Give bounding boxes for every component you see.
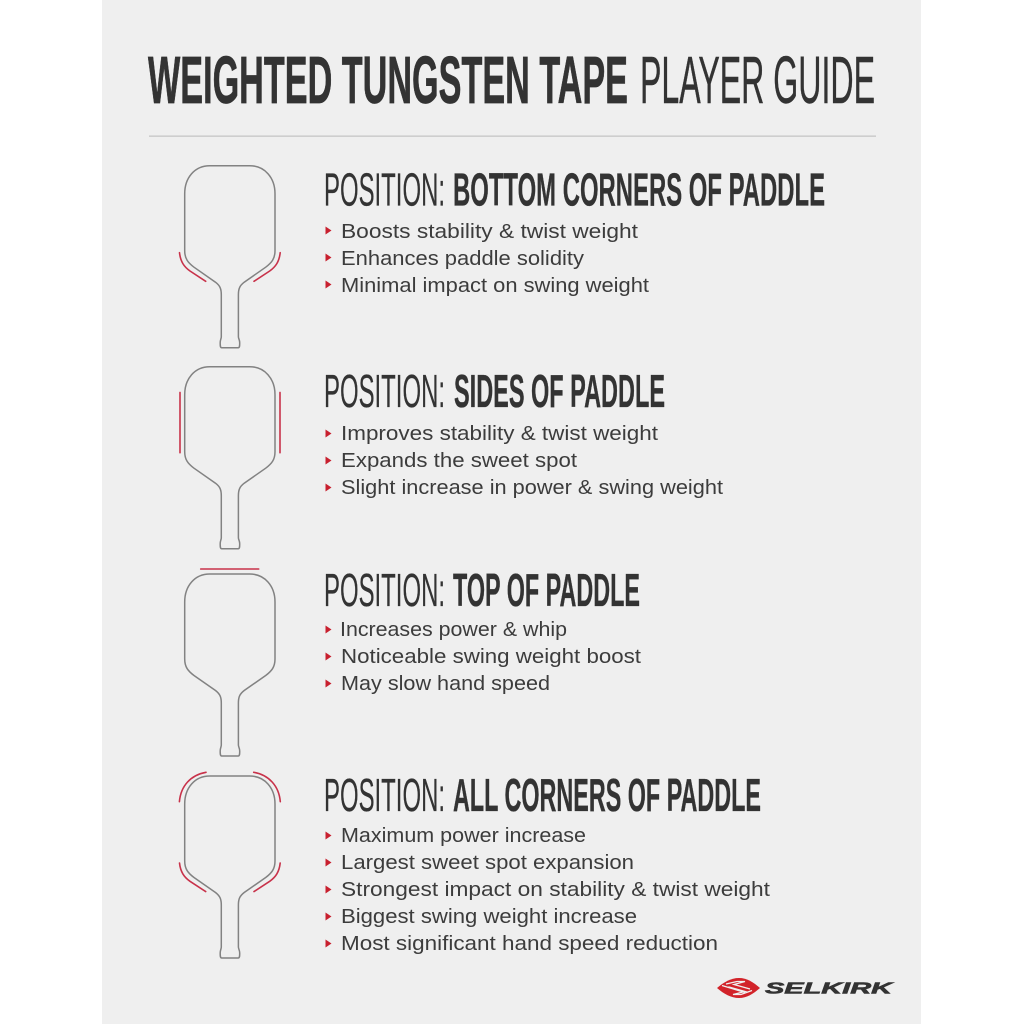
- bullet list: sides: [326, 423, 723, 499]
- background panel: [102, 0, 921, 1024]
- bullet list: bottom corners: [326, 221, 649, 297]
- bullet list: sides: Slight increase in power & swing weight: [341, 477, 723, 499]
- heading: all corners: POSITION:: [324, 769, 445, 821]
- bullet list: all corners: Most significant hand speed reduction: [341, 933, 718, 955]
- bullet list: top: May slow hand speed: [341, 673, 550, 695]
- heading: sides: [324, 365, 665, 417]
- bullet list: all corners: Largest sweet spot expansion: [341, 852, 634, 874]
- icon: paddle with top tape: [185, 569, 275, 756]
- icon: paddle with bottom corner tape: [180, 166, 280, 348]
- heading: all corners: [324, 769, 761, 821]
- bullet list: all corners: Maximum power increase: [341, 825, 586, 847]
- bullet list: top: [326, 619, 641, 695]
- bullet list: top: Noticeable swing weight boost: [341, 646, 641, 668]
- icon: Selkirk mark: [717, 978, 760, 998]
- panel: sides: [180, 365, 723, 549]
- heading: sides: SIDES OF PADDLE: [454, 365, 665, 417]
- icon: paddle with tape on all corners: [179, 772, 280, 958]
- bullet list: bottom corners: Boosts stability & twist weight: [341, 221, 638, 243]
- heading: top: TOP OF PADDLE: [453, 564, 640, 616]
- panel: top: [185, 564, 641, 756]
- bullet list: bottom corners: Enhances paddle solidity: [341, 248, 584, 270]
- bullet list: sides: Expands the sweet spot: [341, 450, 577, 472]
- heading: top: POSITION:: [324, 564, 445, 616]
- bullet list: top: Increases power & whip: [340, 619, 567, 641]
- heading: sides: POSITION:: [324, 365, 445, 417]
- logo: Selkirk: [717, 978, 895, 998]
- bullet list: all corners: Biggest swing weight increase: [341, 906, 637, 928]
- heading: bottom corners: [324, 164, 825, 216]
- wordmark: SELKIRK: [765, 980, 895, 998]
- bullet list: bottom corners: Minimal impact on swing weight: [341, 275, 649, 297]
- bullet list: all corners: [326, 825, 770, 955]
- panel: all corners: [179, 769, 770, 958]
- heading: bottom corners: POSITION:: [324, 164, 445, 216]
- icon: paddle with side tape: [180, 367, 280, 549]
- bullet list: sides: Improves stability & twist weight: [341, 423, 658, 445]
- bullet list: all corners: Strongest impact on stability & twist weight: [341, 879, 770, 901]
- panel: bottom corners: [180, 164, 825, 348]
